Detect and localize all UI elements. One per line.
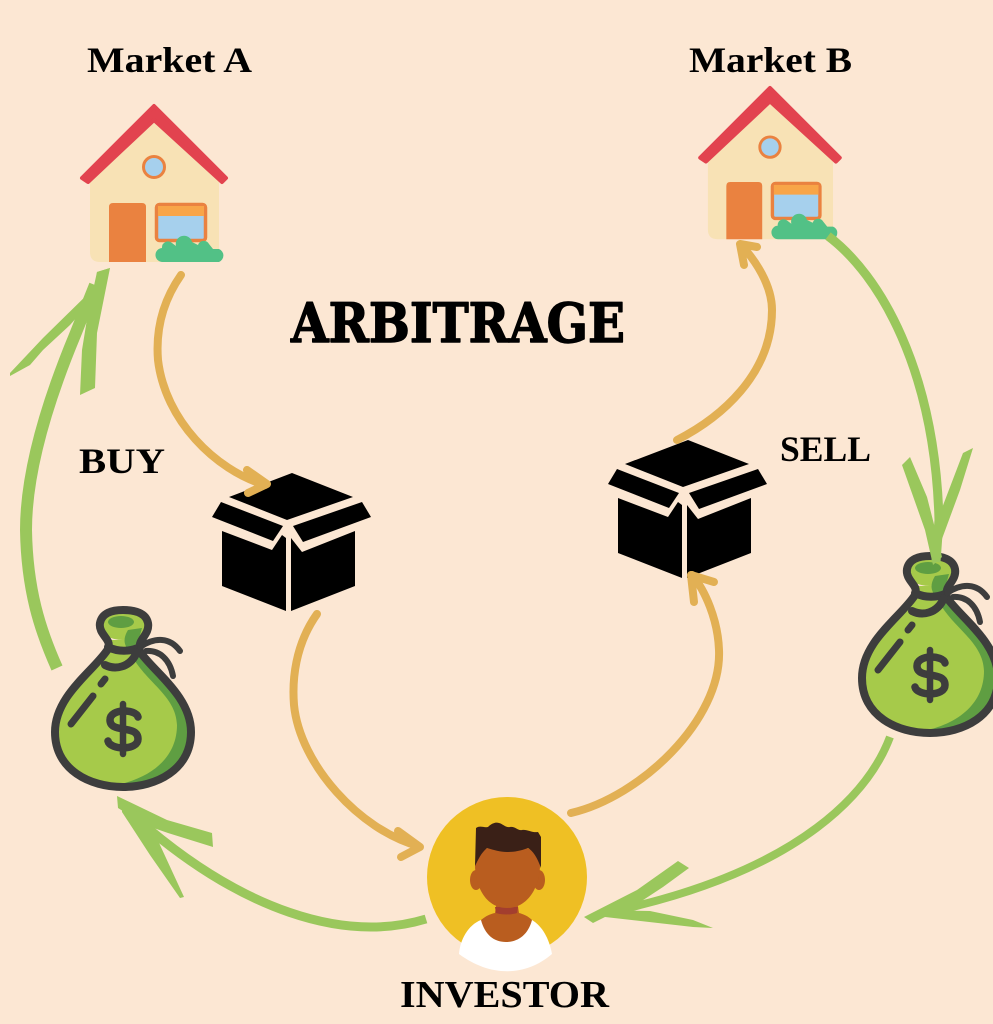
label: BUY: BUY xyxy=(79,441,165,481)
label: Market B: Market B xyxy=(689,40,852,80)
arrow: box to investor xyxy=(293,614,420,857)
arrow: investor to box xyxy=(571,575,719,813)
icon: box, buy xyxy=(212,473,371,611)
arrow: money bag to investor xyxy=(584,737,890,928)
icon: house, Market A xyxy=(82,106,226,262)
arrow: money bag to Market A xyxy=(10,268,110,668)
icon: investor portrait xyxy=(427,797,587,971)
icon: money bag, left xyxy=(55,610,191,787)
label: INVESTOR: INVESTOR xyxy=(400,974,610,1016)
icon: money bag, right xyxy=(862,556,993,733)
arrow: Market B to money bag xyxy=(828,236,973,565)
title: ARBITRAGE xyxy=(290,291,625,355)
icon: box, sell xyxy=(608,440,767,578)
arrow: box to Market B xyxy=(677,244,772,440)
arrow: Market A to box xyxy=(158,275,267,493)
label: Market A: Market A xyxy=(87,40,252,80)
label: SELL: SELL xyxy=(780,429,871,469)
icon: house, Market B xyxy=(700,88,840,239)
arrow: investor to money bag xyxy=(117,796,426,927)
